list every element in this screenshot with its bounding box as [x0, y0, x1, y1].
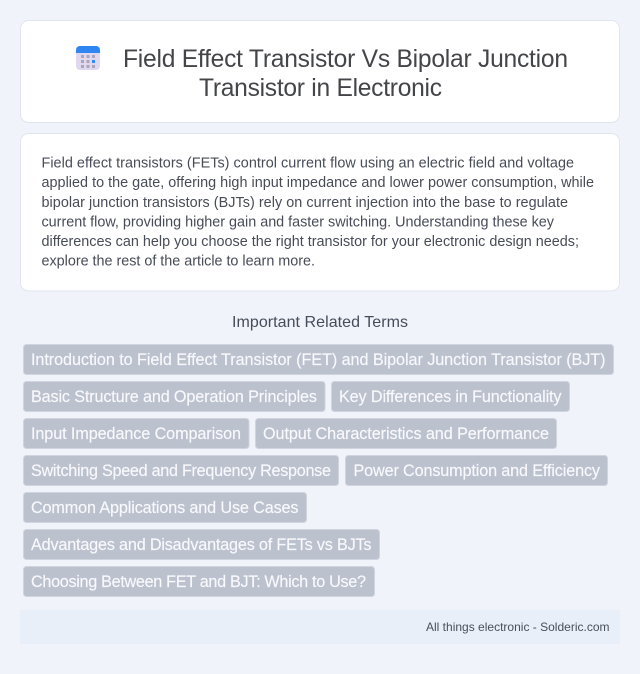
footer: [20, 610, 620, 644]
text block: description: differences can help you choose the right transistor for your electronic design needs;: [42, 234, 579, 250]
panel: description: [20, 134, 620, 291]
tag: input impedance: Input Impedance Comparison: [31, 425, 241, 443]
tag: switching speed: Switching Speed and Frequency Response: [31, 462, 331, 480]
tag list: [24, 344, 614, 596]
tag: choosing: [24, 566, 374, 596]
tag: introduction: Introduction to Field Effect Transistor (FET) and Bipolar Junction Transistor (BJT): [31, 351, 606, 369]
tag: introduction: [24, 344, 614, 374]
text block: description: applied to the gate, offering high input impedance and lower power consumption, while: [42, 175, 594, 191]
title: [123, 46, 568, 102]
tag: choosing: Choosing Between FET and BJT: Which to Use?: [31, 573, 366, 591]
footer: All things electronic - Solderic.com: [426, 620, 610, 634]
title: Transistor in Electronic: [199, 75, 442, 102]
tag: advantages: [24, 530, 380, 560]
panel: header: [20, 20, 620, 122]
tag: output characteristics: [256, 418, 556, 448]
tag: basic structure: Basic Structure and Operation Principles: [31, 388, 317, 406]
tag: applications: [24, 492, 306, 522]
text block: description: current flow, providing higher gain and faster switching. Understanding these key: [42, 214, 555, 230]
tag: power consumption: Power Consumption and Efficiency: [354, 462, 601, 480]
tag: basic structure: [24, 382, 325, 412]
tag: output characteristics: Output Characteristics and Performance: [263, 425, 549, 443]
title: Field Effect Transistor Vs Bipolar Junction: [123, 46, 568, 73]
icon: calendar: [76, 46, 100, 70]
tag: input impedance: [24, 418, 249, 448]
text block: description: explore the rest of the article to learn more.: [42, 254, 315, 270]
text block: description: Field effect transistors (FETs) control current flow using an electric field and voltage: [42, 156, 574, 172]
tag: advantages: Advantages and Disadvantages of FETs vs BJTs: [31, 536, 372, 554]
tag: key differences: Key Differences in Functionality: [339, 388, 562, 406]
tag: key differences: [332, 382, 570, 412]
tag: switching speed: [24, 456, 338, 486]
tag: applications: Common Applications and Use Cases: [31, 499, 298, 517]
text block: description: bipolar junction transistors (BJTs) rely on current injection into the base to regulate: [42, 195, 568, 211]
text block: description: [42, 156, 594, 270]
heading: related terms: Important Related Terms: [232, 314, 408, 331]
tag: power consumption: [346, 456, 608, 486]
